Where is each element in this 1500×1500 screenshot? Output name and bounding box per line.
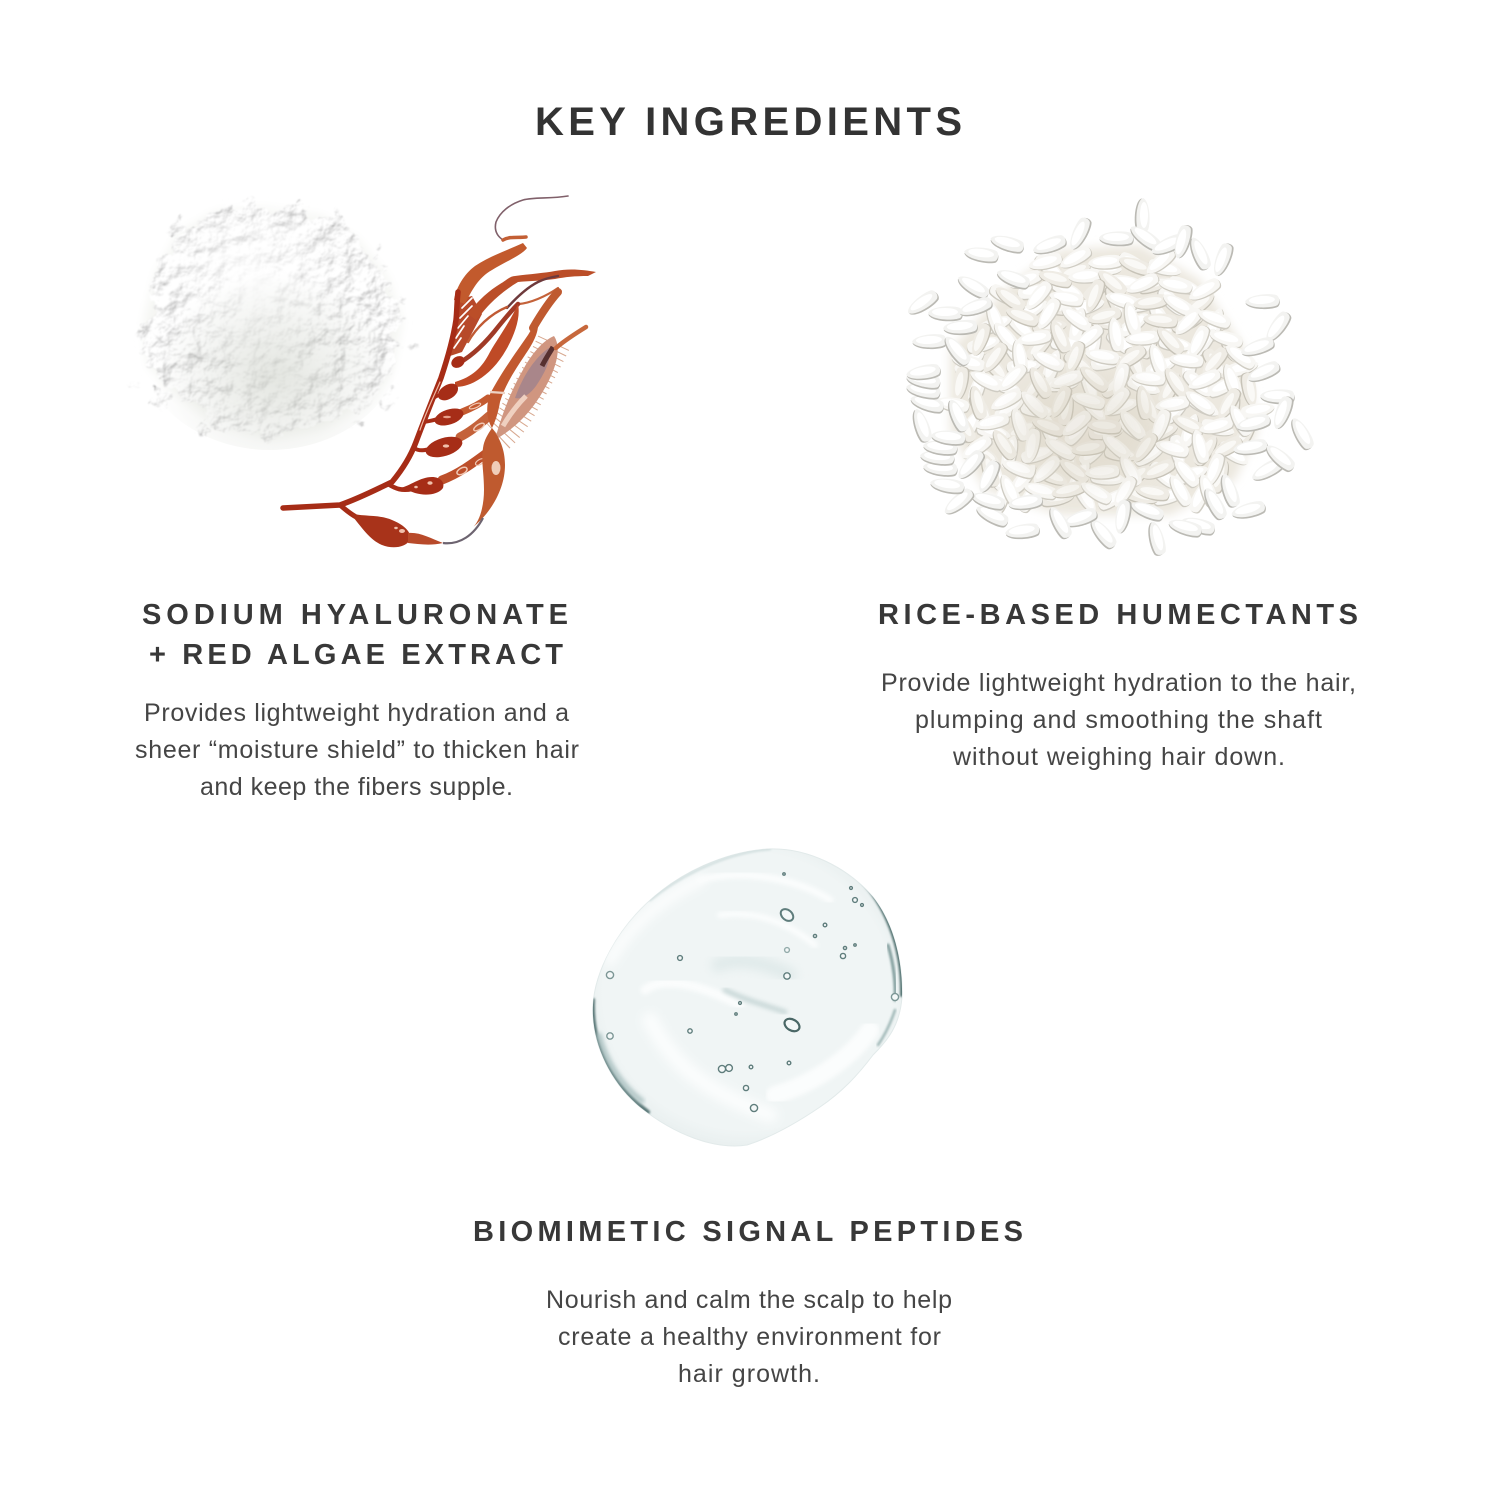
panel: rice-based humectants <box>878 198 1358 771</box>
gel shadows <box>593 849 902 1112</box>
description: sodium hyaluronate + red algae extract: Provides lightweight hydration and a <box>144 699 569 727</box>
scattered rice grains <box>904 198 1317 557</box>
description: biomimetic signal peptides: hair growth. <box>678 1360 820 1388</box>
description: sodium hyaluronate + red algae extract: and keep the fibers supple. <box>200 773 513 801</box>
gel bubbles <box>606 873 899 1112</box>
serrated blade <box>495 327 586 440</box>
panel: biomimetic signal peptides <box>473 849 1023 1388</box>
blade from fourth float <box>455 304 519 387</box>
long twisted blade <box>443 292 558 543</box>
heading: sodium hyaluronate + red algae extract: + RED ALGAE EXTRACT <box>149 639 563 671</box>
heading: sodium hyaluronate + red algae extract <box>142 599 568 671</box>
top blade <box>454 243 527 304</box>
description: biomimetic signal peptides: Nourish and calm the scalp to help <box>546 1286 952 1314</box>
description: rice-based humectants: without weighing hair down. <box>952 743 1285 771</box>
image: white powder pile <box>130 199 414 450</box>
description: rice-based humectants: Provide lightweight hydration to the hair, <box>881 669 1356 697</box>
heading: rice-based humectants: RICE-BASED HUMECTANTS <box>878 599 1358 631</box>
dark strands <box>455 276 558 365</box>
image: red algae frond <box>283 196 596 547</box>
description: rice-based humectants: plumping and smoothing the shaft <box>915 706 1322 734</box>
description: biomimetic signal peptides <box>546 1286 952 1388</box>
upper long branch <box>468 269 596 320</box>
image: rice pile <box>904 198 1317 557</box>
image: clear gel droplet <box>593 849 902 1146</box>
description: biomimetic signal peptides: create a healthy environment for <box>558 1323 941 1351</box>
main stem <box>283 292 458 518</box>
description: sodium hyaluronate + red algae extract: sheer “moisture shield” to thicken hair <box>135 736 579 764</box>
infographic canvas <box>128 107 1357 1387</box>
curl at the tip <box>495 196 568 240</box>
float bulbs <box>350 354 467 547</box>
panel: sodium hyaluronate and red algae <box>130 196 596 801</box>
gel highlights <box>610 875 870 1115</box>
lower float blades <box>442 398 489 480</box>
hatched base of upper blades <box>450 296 482 356</box>
title: KEY INGREDIENTS <box>535 100 962 144</box>
heading: biomimetic signal peptides: BIOMIMETIC SIGNAL PEPTIDES <box>473 1216 1023 1248</box>
description: sodium hyaluronate + red algae extract <box>135 699 579 801</box>
description: rice-based humectants <box>881 669 1356 771</box>
heading: sodium hyaluronate + red algae extract: SODIUM HYALURONATE <box>142 599 568 631</box>
